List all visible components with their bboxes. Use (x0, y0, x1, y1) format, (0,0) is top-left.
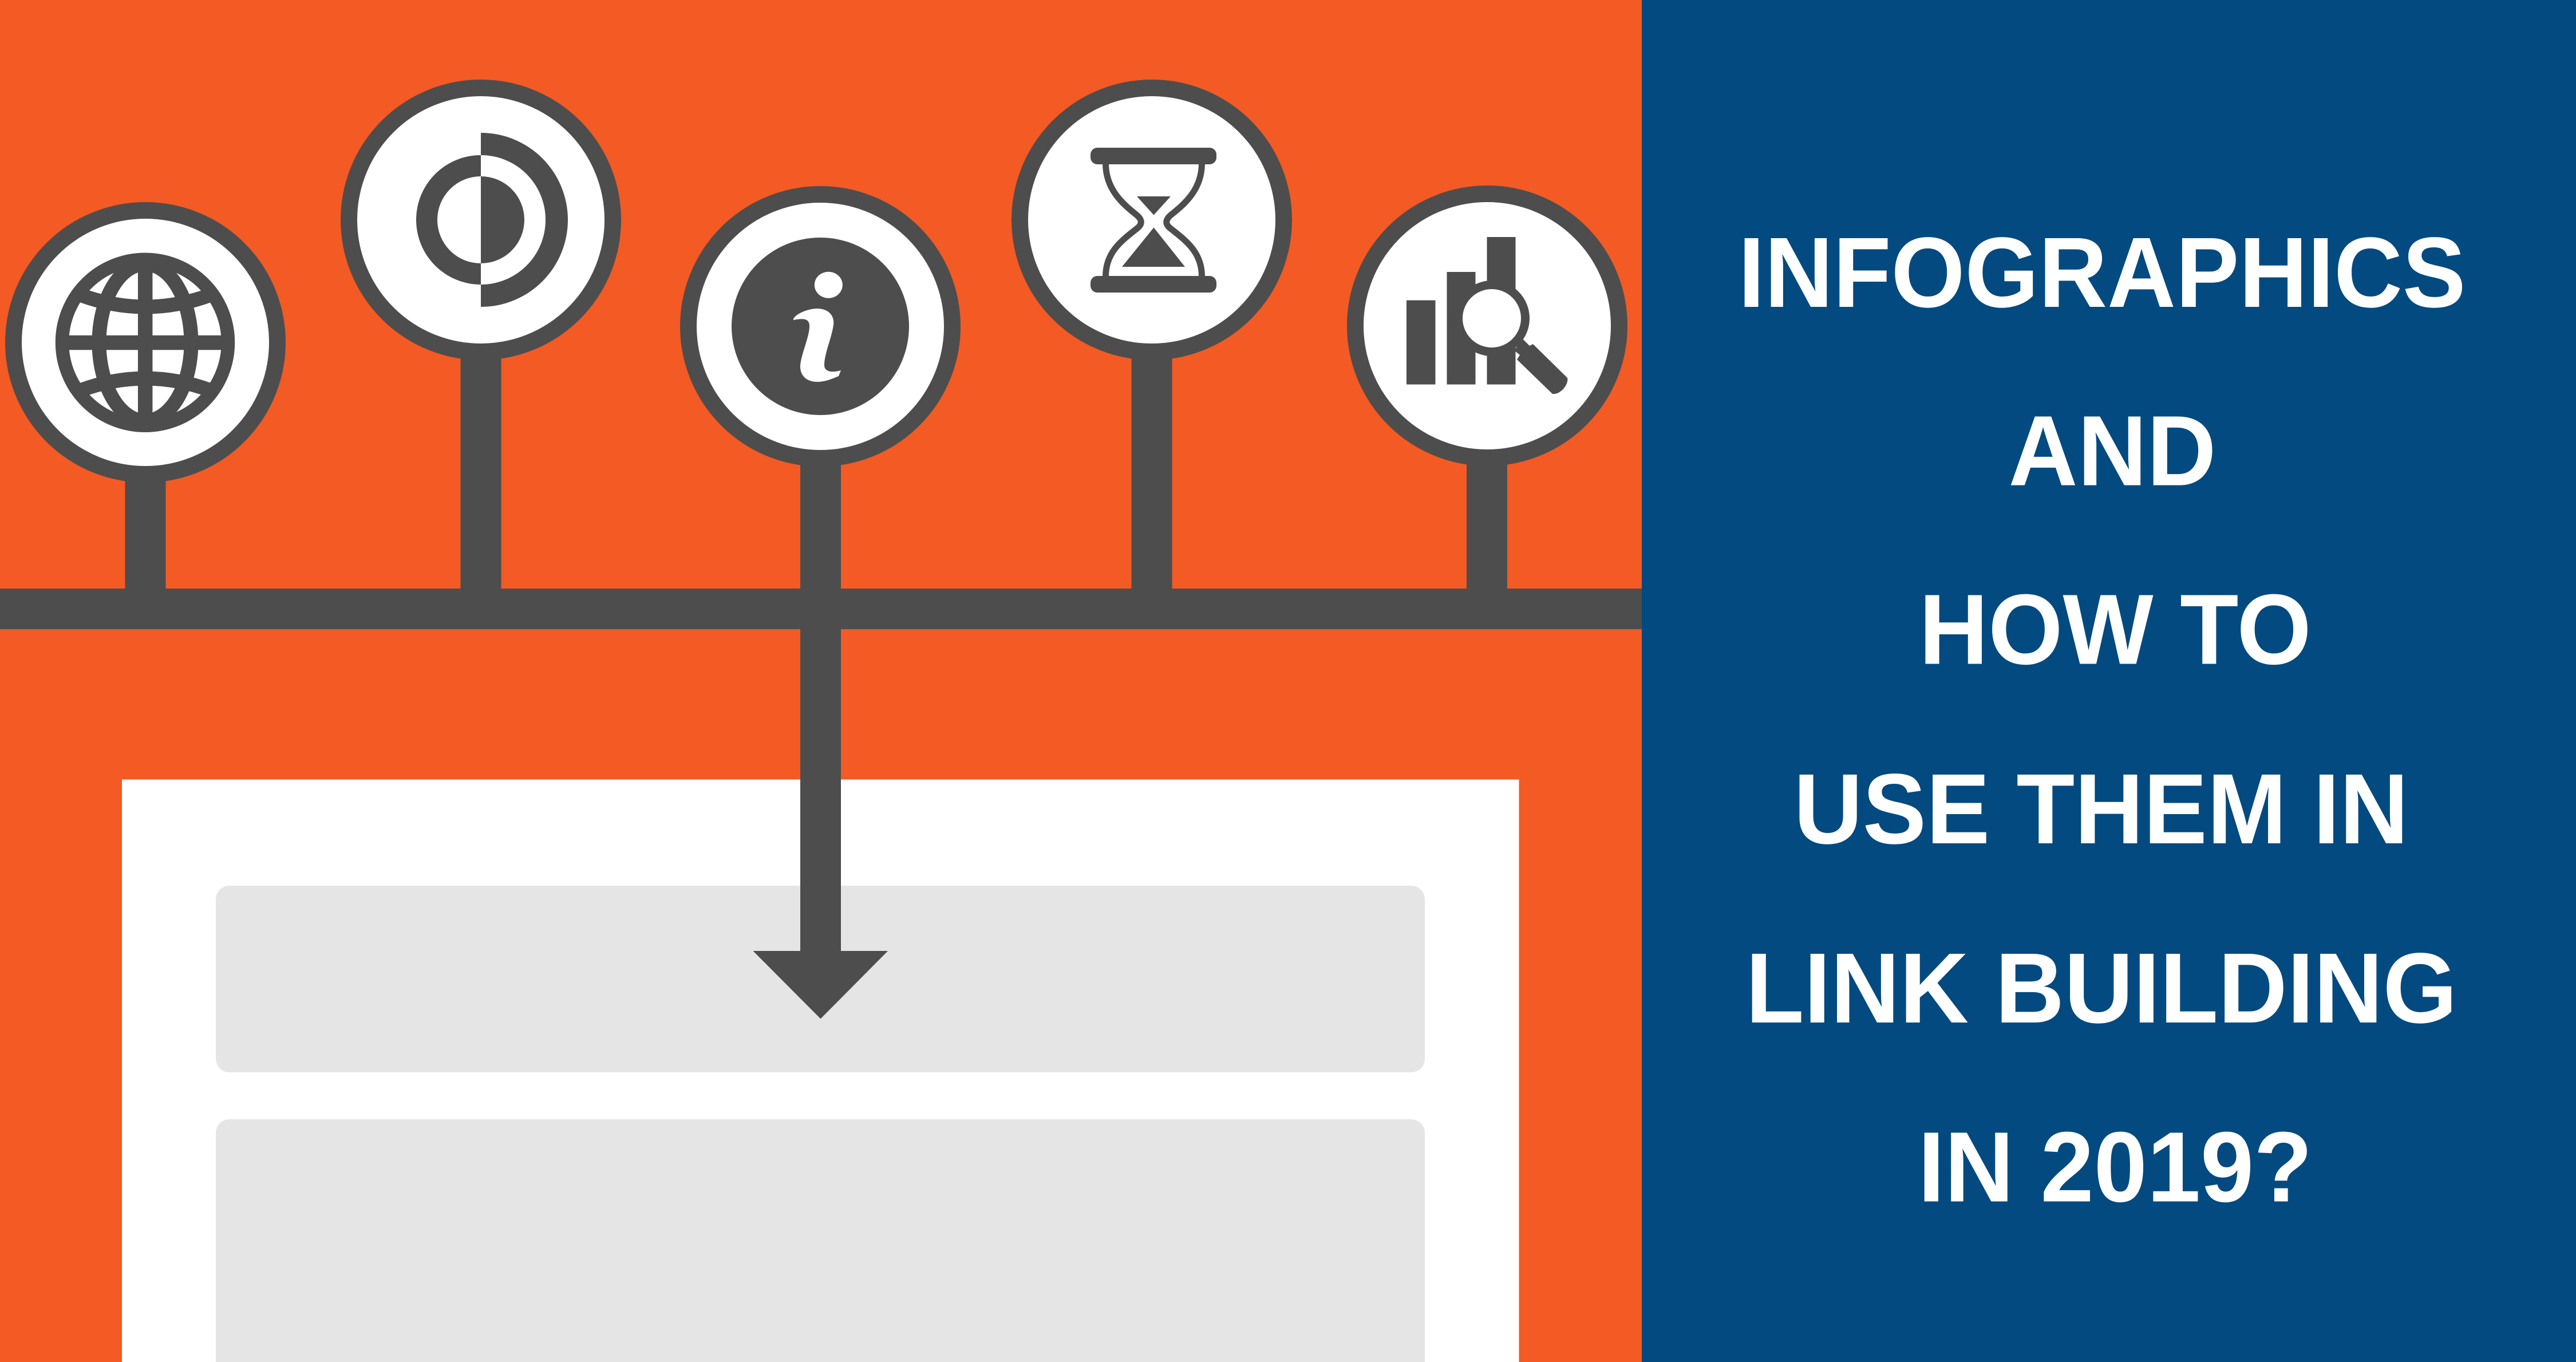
marker: chart search (1356, 194, 1619, 595)
title line 1: INFOGRAPHICS (1739, 217, 2466, 329)
marker: target (349, 88, 613, 595)
title line 4: USE THEM IN (1794, 754, 2408, 865)
panel: white document card (122, 780, 1519, 1362)
icon: bar chart with magnifier (1406, 237, 1567, 394)
title line 5: LINK BUILDING (1746, 933, 2457, 1044)
icon: hourglass (1091, 148, 1216, 293)
title line 6: IN 2019? (1918, 1111, 2312, 1223)
marker: hourglass (1020, 88, 1283, 595)
icon: information (732, 238, 909, 415)
grey content block 1 (216, 886, 1425, 1072)
icon: globe (60, 258, 230, 427)
horizontal timeline bar (0, 589, 1642, 629)
title line 3: HOW TO (1919, 574, 2312, 685)
arrow: info marker pointing into the document (688, 195, 953, 1019)
grey content block 2 (216, 1119, 1425, 1362)
marker: globe (14, 211, 277, 595)
panel: blue title (1642, 0, 2576, 1362)
title line 2: AND (2009, 395, 2216, 507)
icon: half-inverted target (416, 133, 568, 307)
panel: orange illustration (0, 0, 1642, 1362)
